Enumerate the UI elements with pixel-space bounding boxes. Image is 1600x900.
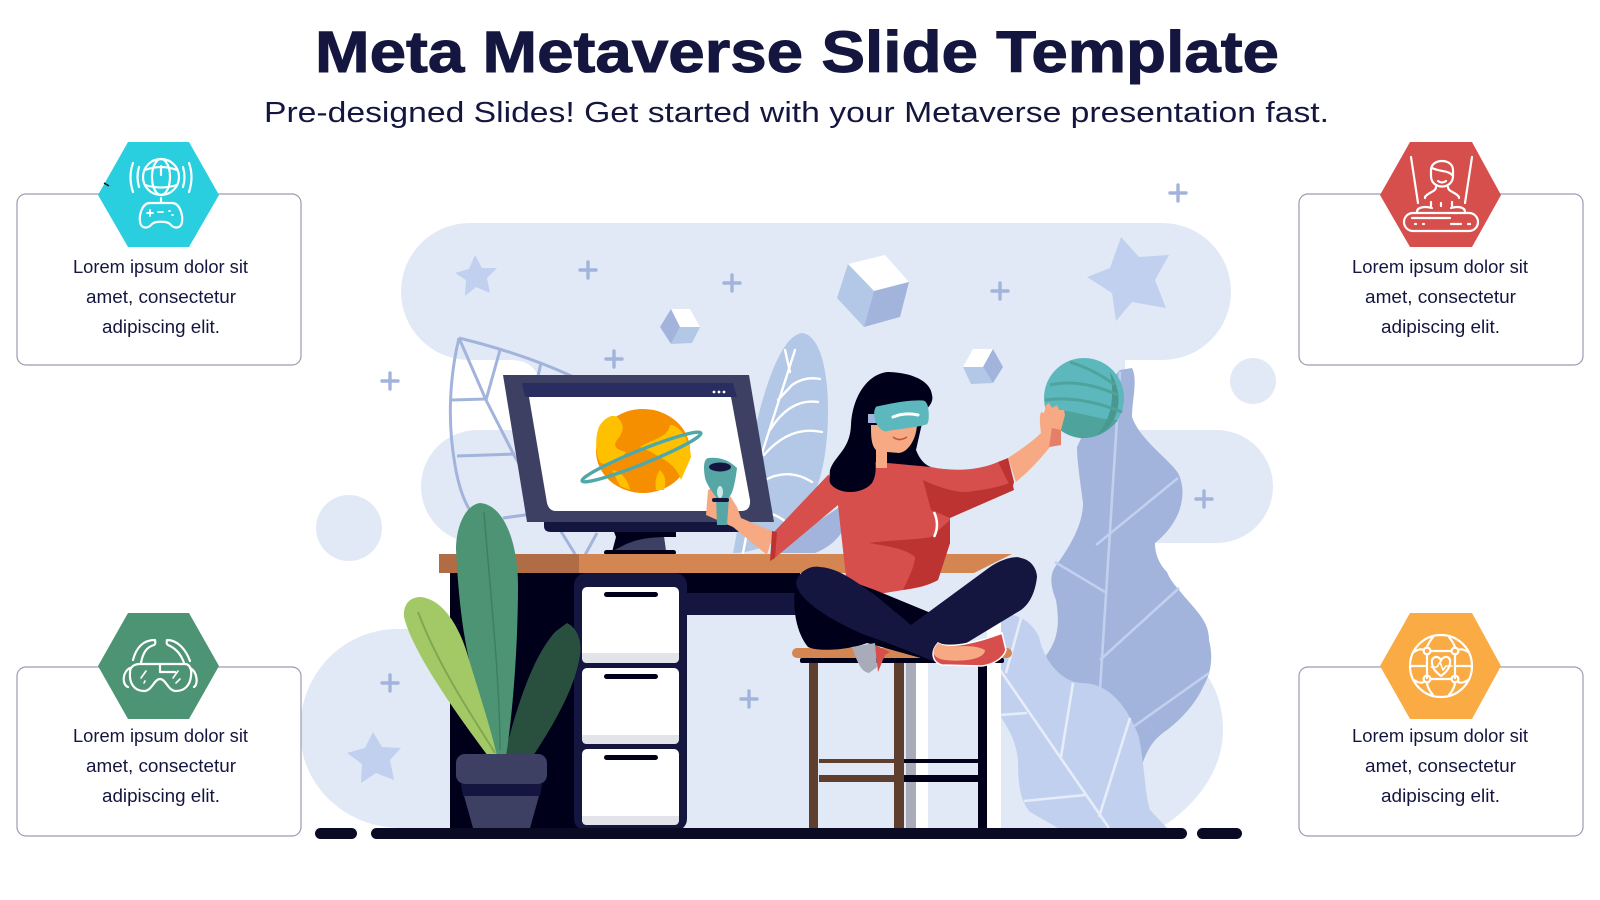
- big blue leaf: [1040, 368, 1211, 828]
- text: top left: adipiscing elit.: [102, 317, 220, 337]
- controller: [704, 458, 737, 525]
- title: Meta Metaverse Slide Template: [315, 20, 1279, 85]
- icon: virtual avatar hexagon: [1380, 142, 1501, 247]
- text: top left: [73, 257, 248, 337]
- icon: VR glasses hexagon: [98, 613, 219, 719]
- text: bottom right: adipiscing elit.: [1381, 786, 1500, 806]
- text: top right: [1352, 257, 1528, 337]
- green planet: [1044, 358, 1124, 438]
- icon: globe and gamepad hexagon: [98, 142, 219, 247]
- text: bottom right: amet, consectetur: [1365, 756, 1516, 776]
- text: top left: amet, consectetur: [86, 287, 236, 307]
- card: top left: [17, 194, 301, 365]
- stars: [347, 237, 1169, 783]
- VR goggles: [868, 402, 927, 430]
- face and neck: [871, 425, 917, 468]
- light leaf: [1000, 614, 1167, 828]
- planet on screen: [580, 409, 703, 493]
- feet: [852, 643, 877, 673]
- legs: [794, 570, 960, 662]
- left arm and hand: [706, 483, 774, 555]
- card: top right: [1299, 194, 1583, 365]
- floor line: [315, 828, 1242, 839]
- background blobs: [300, 223, 1276, 828]
- illustration: metaverse workspace: [300, 185, 1276, 839]
- plus signs: [382, 185, 1212, 707]
- hair: [830, 372, 932, 494]
- plant: [404, 503, 580, 828]
- drawers: [574, 573, 687, 831]
- text: bottom right: [1352, 726, 1528, 806]
- card: bottom right: [1299, 667, 1583, 836]
- text: top right: amet, consectetur: [1365, 287, 1516, 307]
- text: top right: adipiscing elit.: [1381, 317, 1500, 337]
- stool: [792, 617, 1012, 837]
- icon: globe with heartbeat hexagon: [1380, 613, 1501, 719]
- blue leaf behind monitor: [733, 333, 850, 553]
- text: bottom right: Lorem ipsum dolor sit: [1352, 726, 1528, 746]
- text: bottom left: amet, consectetur: [86, 756, 236, 776]
- subtitle: Pre-designed Slides! Get started with your Metaverse presentation fast.: [264, 97, 1329, 129]
- text: bottom left: Lorem ipsum dolor sit: [73, 726, 248, 746]
- hair lobe over shirt: [830, 430, 876, 492]
- monitor: [503, 375, 774, 555]
- text: top left: Lorem ipsum dolor sit: [73, 257, 248, 277]
- outline leaf: [450, 338, 597, 555]
- cubes: [660, 255, 1003, 384]
- text: top right: Lorem ipsum dolor sit: [1352, 257, 1528, 277]
- right arm: [1008, 403, 1065, 482]
- text: bottom left: [73, 726, 248, 806]
- shirt: [770, 462, 1014, 595]
- card: bottom left: [17, 667, 301, 836]
- woman: [704, 372, 1065, 673]
- text: bottom left: adipiscing elit.: [102, 786, 220, 806]
- desk: [439, 554, 1012, 830]
